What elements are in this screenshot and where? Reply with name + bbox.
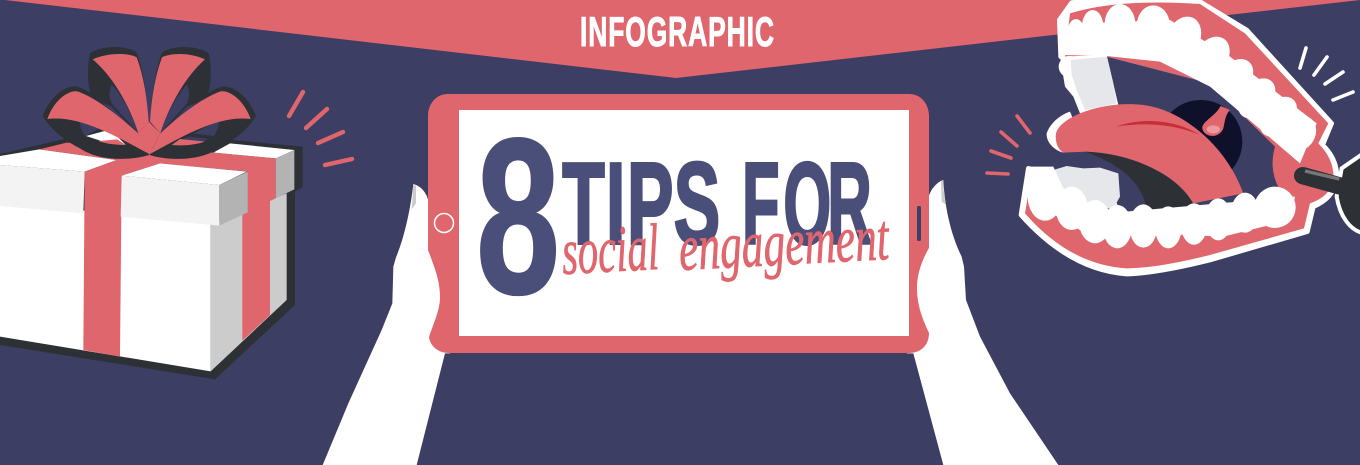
top banner bbox=[5, 0, 1360, 78]
uvula bbox=[1202, 106, 1230, 136]
right hand bbox=[907, 180, 1058, 465]
left hand bbox=[323, 184, 450, 465]
script subtitle bbox=[560, 201, 892, 289]
upper back teeth bbox=[1059, 55, 1118, 113]
crank handle bbox=[1303, 176, 1340, 186]
mouth rays coral bbox=[987, 116, 1030, 174]
tongue crease bbox=[1116, 121, 1200, 135]
lower back teeth bbox=[1053, 166, 1120, 208]
tablet screen bbox=[459, 110, 909, 336]
script subtitle: engagement bbox=[677, 201, 892, 285]
headline text bbox=[562, 139, 872, 269]
headline number: 8 bbox=[476, 93, 560, 341]
upper teeth bbox=[1058, 4, 1324, 163]
tablet bbox=[428, 94, 929, 353]
banner label: INFOGRAPHIC bbox=[580, 9, 775, 56]
jaw outline bbox=[1021, 0, 1337, 274]
script subtitle: social bbox=[560, 211, 661, 289]
crank grip bbox=[1337, 153, 1360, 233]
lower teeth bbox=[1028, 167, 1296, 248]
mouth rays white bbox=[1300, 48, 1353, 100]
throat bbox=[1159, 100, 1242, 183]
gift sparkle rays bbox=[289, 92, 352, 165]
side button bbox=[917, 206, 921, 241]
bow bbox=[43, 47, 256, 159]
mouth interior bbox=[1067, 57, 1280, 213]
headline text: FOR bbox=[742, 139, 872, 268]
dark under tongue bbox=[1085, 152, 1193, 218]
gums bbox=[1025, 2, 1333, 268]
icon: wind-up teeth bbox=[1021, 0, 1360, 274]
icon: gift box bbox=[0, 128, 303, 379]
tongue bbox=[1047, 112, 1083, 153]
home button bbox=[434, 214, 454, 232]
headline text: TIPS bbox=[562, 139, 720, 269]
